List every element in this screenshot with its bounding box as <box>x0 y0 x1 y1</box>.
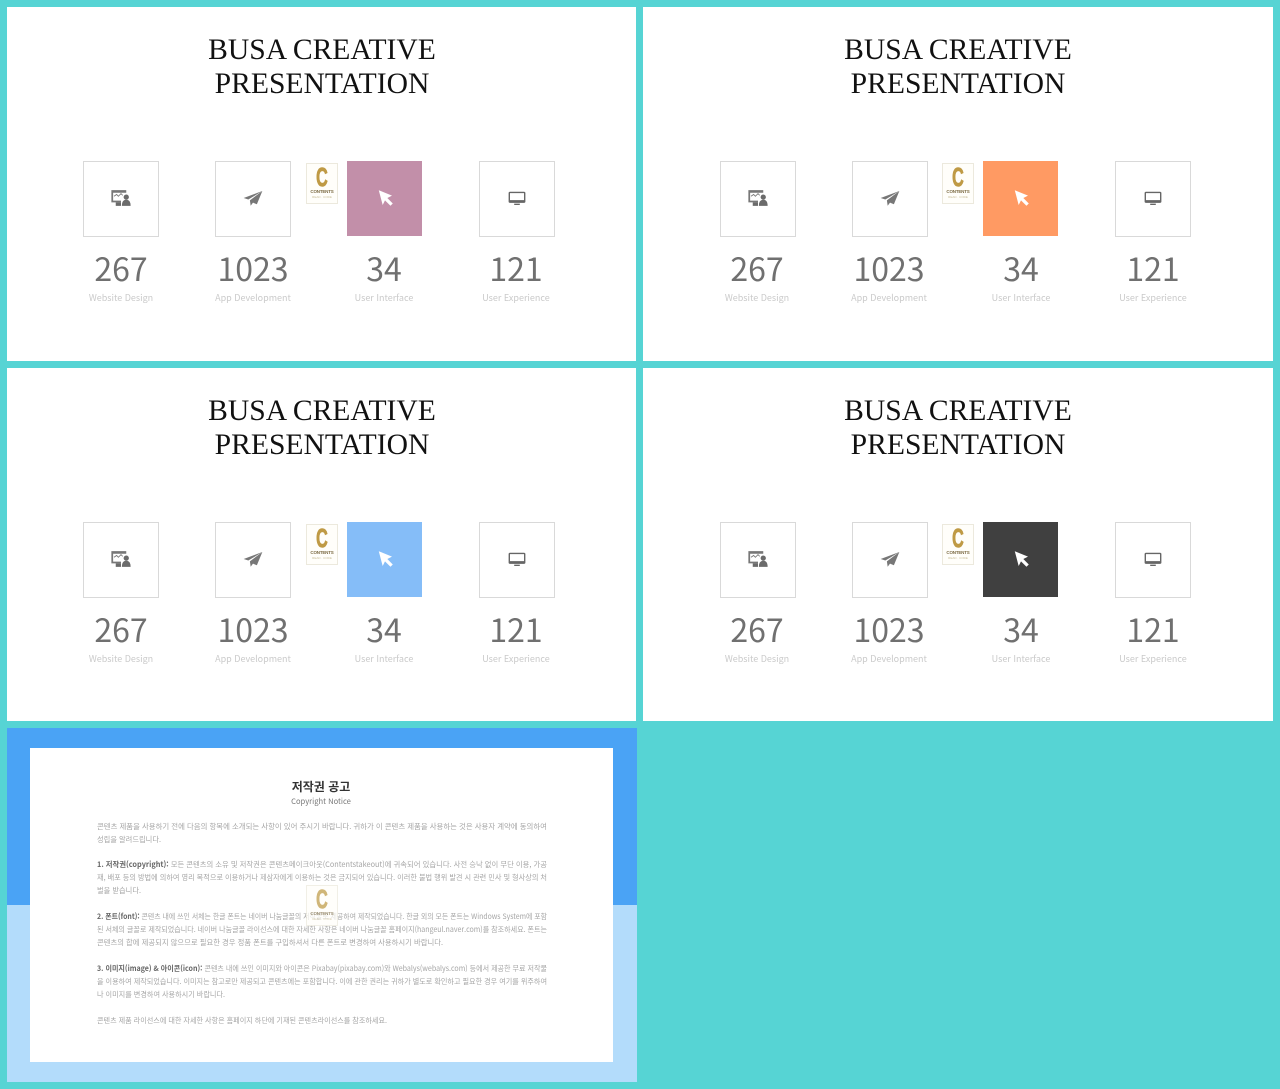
notice body text: 벌을 받습니다. <box>97 885 141 896</box>
icon box: app development <box>215 161 291 237</box>
notice subheading: Copyright Notice <box>291 796 351 807</box>
logo badge <box>306 524 338 565</box>
icon box: app development <box>215 522 291 598</box>
stat: user experience: 121 <box>1126 245 1180 291</box>
panel: slide 3 blue <box>7 368 636 721</box>
title <box>844 34 1072 100</box>
stat: user experience: 121 <box>489 606 543 652</box>
notice body text: 콘텐츠 제품 라이선스에 대한 자세한 사항은 홈페이지 하단에 기재된 콘텐츠라이선스를 참조하세요. <box>97 1015 387 1026</box>
stat label: User Interface <box>355 291 413 304</box>
highlighted icon box: user interface <box>347 161 422 236</box>
logo badge: READ · CODE <box>312 556 332 560</box>
panel: slide 4 dark <box>643 368 1273 721</box>
icon box: app development <box>852 522 928 598</box>
logo badge <box>942 163 974 204</box>
notice body text: 된 서체의 글꼴로 제작되었습니다. 네이버 나눔글꼴 라이선스에 대한 자세한 사항은 네이버 나눔글꼴 홈페이지(hangeul.naver.com)를 참조하세요. 폰트는 <box>97 924 547 935</box>
icon box: website design <box>83 522 159 598</box>
title: PRESENTATION <box>851 428 1065 460</box>
stat label: User Experience <box>1119 291 1187 304</box>
title <box>208 394 436 460</box>
stat: user experience: 121 <box>489 245 543 291</box>
stat: user interface: 34 <box>1003 606 1039 652</box>
logo badge watermark: READ · CODE <box>312 917 332 921</box>
stat label: User Interface <box>992 652 1050 665</box>
blue header band <box>7 728 637 905</box>
icon box: website design <box>720 161 796 237</box>
logo badge: READ · CODE <box>948 556 968 560</box>
notice body text: 재, 배포 등의 방법에 의하여 영리 목적으로 이용하거나 제삼자에게 이용하는 것은 금지되어 있습니다. 이러한 불법 행위 발견 시 관련 민사 및 형사상의 처 <box>97 872 547 883</box>
stat label: App Development <box>851 291 927 304</box>
stat: website design: 267 <box>730 245 784 291</box>
notice body text: 2. 폰트(font): 콘텐츠 내에 쓰인 서체는 한글 폰트는 네이버 나눔글꼴의 저작물로 제공하여 제작되었습니다. 한글 외의 모든 폰트는 Windows System에 포함 <box>97 911 547 922</box>
stat label: User Interface <box>355 652 413 665</box>
stat: website design: 267 <box>730 606 784 652</box>
icon box: user experience <box>479 522 555 598</box>
stat: website design: 267 <box>94 245 148 291</box>
title: BUSA CREATIVE <box>844 34 1072 66</box>
stat: user interface: 34 <box>366 245 402 291</box>
notice body text: 을 이용하여 제작되었습니다. 이미지는 참고로만 제공되고 콘텐츠에는 포함합니다. 이에 관한 권리는 귀하가 별도로 확인하고 필요한 경우 여기를 위주하여 <box>97 976 547 987</box>
white notice sheet <box>30 748 613 1062</box>
notice body text <box>97 821 547 1026</box>
title: BUSA CREATIVE <box>208 394 436 426</box>
stat: website design: 267 <box>94 606 148 652</box>
icon box: app development <box>852 161 928 237</box>
highlighted icon box: user interface <box>983 161 1058 236</box>
logo badge: CONTENTS <box>310 189 334 194</box>
title: PRESENTATION <box>851 68 1065 100</box>
logo badge: CONTENTS <box>946 550 970 555</box>
title: BUSA CREATIVE <box>208 34 436 66</box>
stat label: User Experience <box>482 652 550 665</box>
logo badge: CONTENTS <box>310 550 334 555</box>
icon box: user experience <box>1115 522 1191 598</box>
title: PRESENTATION <box>215 428 429 460</box>
stat label: App Development <box>851 652 927 665</box>
icon box: website design <box>83 161 159 237</box>
notice body text: 1. 저작권(copyright): 모든 콘텐츠의 소유 및 저작권은 콘텐츠메이크아웃(Contentstakeout)에 귀속되어 있습니다. 사전 승낙 없이 무단 이용, 가공 <box>97 859 547 870</box>
panel: copyright notice <box>7 728 637 1082</box>
logo badge watermark: CONTENTS <box>310 911 334 916</box>
stat: user experience: 121 <box>1126 606 1180 652</box>
notice body text: 나 이미지를 변경하여 사용하시기 바랍니다. <box>97 989 225 1000</box>
stat label: App Development <box>215 652 291 665</box>
stat label: App Development <box>215 291 291 304</box>
notice heading: 저작권 공고 <box>292 778 350 795</box>
logo badge: CONTENTS <box>946 189 970 194</box>
panel: slide 1 mauve <box>7 7 636 361</box>
logo badge: READ · CODE <box>312 195 332 199</box>
title: BUSA CREATIVE <box>844 394 1072 426</box>
stat label: Website Design <box>725 652 789 665</box>
stat label: Website Design <box>725 291 789 304</box>
notice body text: 성립을 알려드립니다. <box>97 834 161 845</box>
logo badge: READ · CODE <box>948 195 968 199</box>
logo badge <box>942 524 974 565</box>
stat: user interface: 34 <box>1003 245 1039 291</box>
panel: slide 2 orange <box>643 7 1273 361</box>
stat label: Website Design <box>89 652 153 665</box>
stat label: User Experience <box>482 291 550 304</box>
stat: app development: 1023 <box>853 245 925 291</box>
stat label: User Interface <box>992 291 1050 304</box>
stat: user interface: 34 <box>366 606 402 652</box>
notice body text: 콘텐츠의 합에 제공되지 않으므로 필요한 경우 정품 폰트를 구입하셔서 다른 폰트로 변경하여 사용하시기 바랍니다. <box>97 937 443 948</box>
title <box>844 394 1072 460</box>
stat: app development: 1023 <box>217 245 289 291</box>
title <box>208 34 436 100</box>
highlighted icon box: user interface <box>347 522 422 597</box>
notice body text: 3. 이미지(image) & 아이콘(icon): 콘텐츠 내에 쓰인 이미지와 아이콘은 Pixabay(pixabay.com)와 Webalys(webalys.com) 등에서 제공한 무료 저작물 <box>97 963 547 974</box>
stat: app development: 1023 <box>853 606 925 652</box>
stat label: User Experience <box>1119 652 1187 665</box>
logo badge watermark <box>306 885 338 926</box>
logo badge <box>306 163 338 204</box>
icon box: user experience <box>1115 161 1191 237</box>
notice body text: 콘텐츠 제품을 사용하기 전에 다음의 항목에 소개되는 사항이 있어 주시기 바랍니다. 귀하가 이 콘텐츠 제품을 사용하는 것은 사용자 계약에 동의하여 <box>97 821 547 832</box>
stat: app development: 1023 <box>217 606 289 652</box>
title: PRESENTATION <box>215 68 429 100</box>
icon box: website design <box>720 522 796 598</box>
icon box: user experience <box>479 161 555 237</box>
stat label: Website Design <box>89 291 153 304</box>
highlighted icon box: user interface <box>983 522 1058 597</box>
